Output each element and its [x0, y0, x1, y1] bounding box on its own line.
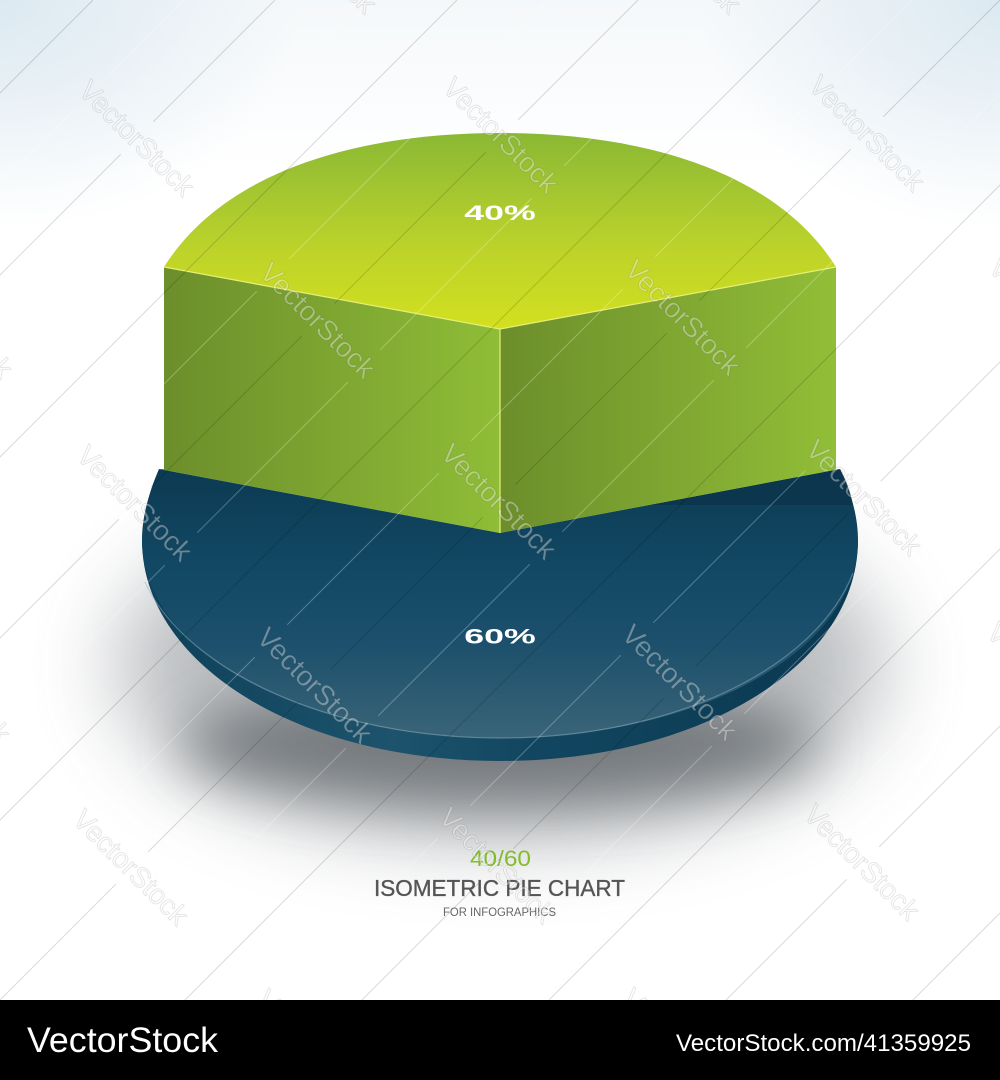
watermark text: VectorStock: [800, 434, 928, 562]
drop shadow under the pie: [115, 490, 885, 840]
title block: [374, 846, 625, 919]
label: 40%: 40%: [464, 201, 536, 225]
pie chart: [142, 133, 858, 761]
ratio heading: 40/60: [470, 846, 531, 871]
watermark text: VectorStock: [433, 802, 561, 930]
watermark text: VectorStock: [619, 254, 747, 382]
footer logo text: VectorStock: [27, 1021, 219, 1060]
watermark text: VectorStock: [803, 70, 931, 198]
label: 60%: 60%: [464, 625, 536, 649]
green right face: [500, 267, 840, 533]
cast shadow wedge: [650, 469, 853, 505]
blue slice top surface: [142, 469, 858, 738]
main title: ISOMETRIC PIE CHART: [374, 875, 625, 901]
green top face: [164, 133, 836, 329]
watermark text: VectorStock: [67, 804, 195, 932]
watermark text: VectorStock: [71, 440, 199, 568]
rim highlight: [145, 573, 853, 738]
watermark text: VectorStock: [616, 619, 744, 747]
footer bar: [0, 1000, 1000, 1080]
watermark text: VectorStock: [437, 72, 565, 200]
watermark text: VectorStock: [798, 799, 926, 927]
blue slice side wall: [142, 540, 858, 761]
slice: 60% blue disc: [142, 469, 858, 761]
green edge highlights: [164, 267, 836, 533]
slice: 40% green block: [159, 133, 840, 533]
watermark text: VectorStock: [251, 622, 379, 750]
footer image id: VectorStock.com/41359925: [676, 1030, 971, 1057]
green left face: [159, 267, 500, 533]
subtitle: FOR INFOGRAPHICS: [443, 907, 556, 919]
watermark text: VectorStock: [254, 257, 382, 385]
watermark text: VectorStock: [435, 438, 563, 566]
watermark text: VectorStock: [73, 75, 201, 203]
